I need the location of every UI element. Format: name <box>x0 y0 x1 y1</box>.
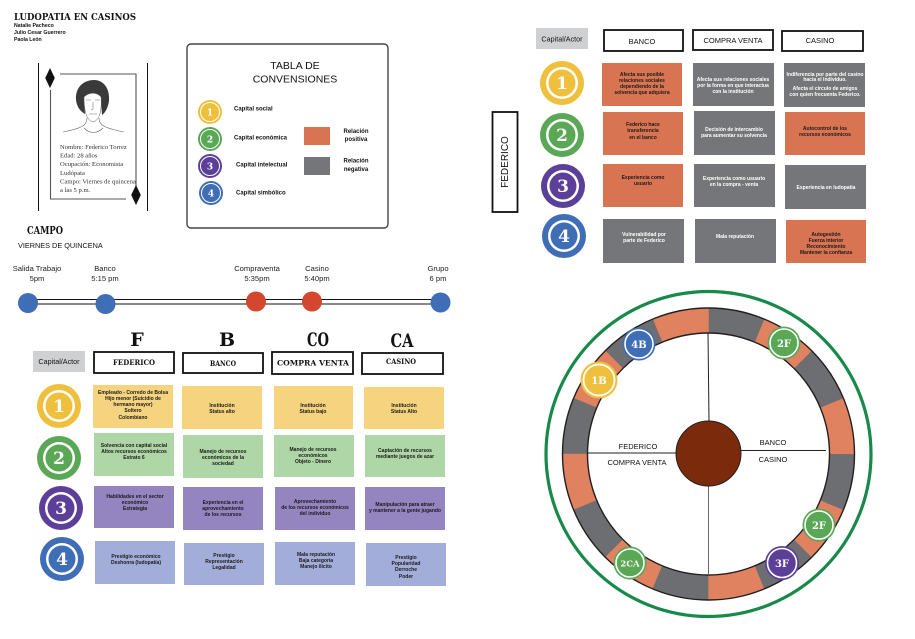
row 3 cells: Experiencia como usuario <box>703 176 765 182</box>
chip 2CA: 2CA <box>620 560 640 570</box>
row 2 cells: mediante juegos de azar <box>376 454 434 460</box>
column letters: CA <box>390 330 414 352</box>
row 3 cells: Experiencia en ludopatía <box>797 185 856 191</box>
wheel labels: FEDERICO <box>619 442 658 451</box>
capital badge 2 <box>37 436 81 480</box>
row 1 cells: Status alto <box>209 409 235 415</box>
row 1 cells: Afecta el círculo de amigos <box>793 86 858 92</box>
chip 2CA <box>614 546 646 580</box>
character description: Edad: 28 años <box>60 152 98 160</box>
capital badge 3: 3 <box>55 499 67 519</box>
row 2 cells: sociedad <box>212 461 234 467</box>
capital badge 3: 3 <box>557 177 569 197</box>
row 1 cells: hacia el individuo. <box>803 77 847 83</box>
character description: Nombre: Federico Torrez <box>60 144 127 151</box>
wheel labels: BANCO <box>760 438 787 447</box>
campo heading: CAMPO <box>27 224 63 237</box>
row 4 cells: Legalidad <box>212 565 236 571</box>
row 1 cells: hermano mayor) <box>113 402 153 408</box>
header: capital/actor: Capital/Actor <box>38 357 80 366</box>
row 2 cells: económicos de la <box>202 455 244 461</box>
row 1 cells: relaciones sociales <box>619 78 665 84</box>
row 2 cells: para aumentar su solvencia <box>701 133 767 139</box>
row 1 cells: Afecta sus posible <box>620 72 664 78</box>
table: federico relations (right) <box>536 28 866 263</box>
header: capital/actor: Capital/Actor <box>541 34 583 44</box>
legend: relacion positiva <box>304 127 369 145</box>
row 4 cells: Fuerza interior <box>809 238 843 244</box>
federico label box: FEDERICO <box>500 136 511 188</box>
legend: capital simbolico: Capital simbólico <box>236 190 286 196</box>
legend heading <box>253 60 337 86</box>
chip 3F <box>765 546 799 580</box>
capital badge 4 <box>542 214 586 258</box>
capital badge 3 <box>541 164 585 208</box>
header: federico: FEDERICO <box>113 358 155 367</box>
row 3 cells: económico <box>122 500 148 506</box>
stop: salida trabajo: 5pm <box>30 274 44 283</box>
row 2 cells: Objeto - Dinero <box>295 459 331 465</box>
row 4 cells: Representación <box>205 559 243 565</box>
row 4 cells <box>603 219 866 263</box>
legend: capital social: Capital social <box>234 106 273 112</box>
legend: relacion negativa: negativa <box>344 167 369 173</box>
stop: grupo: 6 pm <box>430 274 446 283</box>
row 3 cells <box>603 164 866 209</box>
authors: Paola León <box>14 37 42 43</box>
header: casino <box>782 31 863 51</box>
header: compra venta <box>272 352 353 374</box>
header: capital/actor <box>33 351 85 372</box>
row 3 cells: aprovechamiento <box>202 506 244 512</box>
federico label box <box>492 112 518 212</box>
stop: banco: Banco <box>94 264 116 273</box>
row 1 cells: Indiferencia por parte del casino <box>787 72 863 78</box>
row 2 cells: en el banco <box>629 135 657 141</box>
row 3 cells: Habilidades en el sector <box>106 494 164 500</box>
column letters: B <box>219 329 235 351</box>
legend: capital intelectual: Capital intelectual <box>236 162 288 168</box>
row 4 cells: Prestigio <box>395 555 417 561</box>
row 2 cells <box>603 111 865 155</box>
legend heading: CONVENSIONES <box>253 74 337 86</box>
row 4 cells: Prestigio <box>213 553 235 559</box>
row 3 cells: Estrategia <box>123 506 147 512</box>
row 1 cells: Empleado - Corredo de Bolsa <box>98 390 168 396</box>
legend heading: TABLA DE <box>270 60 320 72</box>
capital badge 1 <box>37 384 81 428</box>
legend: capital intelectual <box>198 154 288 178</box>
header: compra venta: COMPRA VENTA <box>277 358 350 368</box>
legend: capital economica: 2 <box>207 136 213 146</box>
capital badge 4 <box>40 537 84 581</box>
character description: Campo: Viernes de quincena <box>60 178 136 186</box>
row 3 cells: de los recursos <box>205 512 242 518</box>
row 2 cells: Solvencia con capital social <box>101 443 168 449</box>
panel: tabla de convensiones <box>187 44 388 228</box>
header: capital/actor <box>536 28 588 49</box>
character description: Ocupación: Economista <box>60 161 123 168</box>
chip 2F bottom: 2F <box>812 521 826 532</box>
capital badge 1: 1 <box>556 74 568 94</box>
row 2 cells: económicos <box>298 453 328 459</box>
header: casino <box>362 353 443 374</box>
row 4 cells: Reconocimiento <box>807 244 845 250</box>
row 2 cells: Decisión de intercambio <box>705 127 763 133</box>
stop: compraventa: 5:35pm <box>244 274 270 283</box>
stop: salida trabajo: Salida Trabajo <box>13 264 61 273</box>
row 2 cells: Federico hace <box>626 122 660 128</box>
legend: capital economica <box>198 127 288 151</box>
header: casino: CASINO <box>386 357 416 366</box>
title: LUDOPATIA EN CASINOS <box>14 12 136 23</box>
capital badge 3 <box>39 486 83 530</box>
legend: relacion positiva: Relación <box>343 129 369 135</box>
capital badge 1: 1 <box>53 397 65 417</box>
column letters: CO <box>307 329 329 351</box>
roulette wheel <box>534 280 883 628</box>
row 1 cells <box>602 63 865 107</box>
row 3 cells: de los recursos económicos <box>281 505 349 511</box>
stop: banco: 5:15 pm <box>91 274 119 283</box>
stop: banco <box>91 264 119 314</box>
wheel labels: CASINO <box>759 455 788 464</box>
header: casino: CASINO <box>806 36 835 45</box>
header: compra venta <box>693 30 773 50</box>
row 4 cells: Poder <box>399 574 413 580</box>
row 2 cells: Captación de recursos <box>378 448 432 454</box>
row 2 cells: transferencia <box>627 128 659 134</box>
row 3 cells: Experiencia en el <box>203 500 244 506</box>
table: capital per actor (left) <box>33 329 446 586</box>
wheel labels: COMPRA VENTA <box>607 458 667 467</box>
header: banco: BANCO <box>629 37 656 46</box>
legend: capital intelectual: 3 <box>207 162 213 172</box>
row 1 cells: solvencia que adquiera <box>614 90 670 96</box>
row 3 cells: Manipulación para atraer <box>375 502 435 508</box>
row 1 cells: Hijo menor (Suicidio de <box>105 396 161 402</box>
row 4 cells: Deshonra (ludopatía) <box>111 560 161 566</box>
row 4 cells: parte de Federico <box>623 238 665 244</box>
capital badge 1 <box>540 61 584 105</box>
row 4 cells: Manejo ilícito <box>300 564 332 570</box>
chip 2F bottom <box>802 508 836 542</box>
row 4 cells: Mala reputación <box>716 234 754 240</box>
row 3 cells: y mantener a la gente jugando <box>369 508 441 514</box>
row 3 cells: Aprovechamiento <box>294 499 336 505</box>
authors: Julio Cesar Guerrero <box>14 30 66 36</box>
legend: relacion negativa: Relación <box>343 158 369 164</box>
row 2 cells: recursos económicos <box>799 132 851 138</box>
row 2 cells: Manejo de recursos <box>290 447 337 453</box>
stop: compraventa <box>234 264 281 312</box>
row 4 cells: Autogestión <box>811 232 841 238</box>
wheel labels <box>607 438 788 467</box>
stop: grupo: Grupo <box>427 264 449 273</box>
legend: capital simbolico <box>199 181 286 205</box>
legend: capital economica: Capital económica <box>234 136 288 142</box>
column letters <box>130 329 414 352</box>
stop: grupo <box>427 264 450 312</box>
character description <box>60 144 136 194</box>
capital badge 2: 2 <box>53 449 65 469</box>
row 4 cells: Mantener la confianza <box>800 250 852 256</box>
row 4 cells: Baja categoría <box>299 558 333 564</box>
chip 1B: 1B <box>591 376 607 387</box>
row 3 cells: usuario <box>634 181 652 187</box>
chip 4B <box>622 328 656 360</box>
row 4 cells: Derroche <box>395 567 417 573</box>
row 2 cells: Altos recursos económicos <box>101 449 167 455</box>
row 4 cells: Prestigio económico <box>111 554 161 560</box>
row 1 cells: con quien frecuenta Federico. <box>789 92 861 98</box>
row 4 cells <box>95 541 446 586</box>
chip 2F top <box>768 326 800 360</box>
header: banco <box>604 30 683 51</box>
row 1 cells: Soltero <box>124 408 142 414</box>
character description: Ludópata <box>60 170 85 177</box>
stop: casino: Casino <box>305 264 329 273</box>
row 3 cells <box>94 486 445 530</box>
row 1 cells: Institución <box>300 403 326 409</box>
legend: capital simbolico: 4 <box>208 190 214 200</box>
stop: casino: 5:40pm <box>304 274 330 283</box>
header: compra venta: COMPRA VENTA <box>703 36 763 45</box>
row 1 cells: dependiendo de la <box>620 84 664 90</box>
campo heading: VIERNES DE QUINCENA <box>18 241 103 250</box>
portrait of Federico <box>63 80 124 132</box>
row 1 cells <box>93 385 444 429</box>
icon: diamond bottom <box>131 185 141 205</box>
legend: capital social: 1 <box>207 108 213 118</box>
legend: relacion positiva: positiva <box>345 137 368 143</box>
campo heading <box>18 224 103 250</box>
authors <box>14 23 66 43</box>
character description: a las 5 p.m. <box>60 187 91 194</box>
stop: salida trabajo <box>13 264 61 313</box>
row 4 cells: Vulnerabilidad por <box>622 232 666 238</box>
row 1 cells: Afecta sus relaciones sociales <box>697 77 769 83</box>
capital badge 2: 2 <box>556 126 568 146</box>
row 1 cells: Institución <box>391 403 417 409</box>
capital badge 4: 4 <box>558 227 570 247</box>
row 3 cells: Experiencia como <box>622 175 664 181</box>
row 4 cells: Popularidad <box>392 561 420 567</box>
chip 2F top: 2F <box>777 339 791 350</box>
chip 3F: 3F <box>775 559 789 570</box>
header: banco <box>183 353 263 373</box>
row 2 cells: Estrato 6 <box>123 455 145 461</box>
row 2 cells: Manejo de recursos <box>200 449 247 455</box>
capital badge 2 <box>540 113 584 157</box>
icon: diamond top <box>45 68 55 88</box>
legend: relacion negativa <box>304 157 369 175</box>
stop: compraventa: Compraventa <box>234 264 281 273</box>
row 3 cells: en la compra - venta <box>710 182 758 188</box>
timeline <box>13 264 450 314</box>
row 1 cells: por la forma en que interactua <box>697 83 769 89</box>
capital badge 4: 4 <box>56 550 68 570</box>
header: federico <box>94 352 174 373</box>
row 1 cells: Colombiano <box>119 415 147 421</box>
chip 1B <box>580 362 618 398</box>
row 2 cells <box>94 433 445 478</box>
row 3 cells: del individuo <box>300 511 330 517</box>
header: banco: BANCO <box>210 359 236 368</box>
row 1 cells: Status bajo <box>300 409 326 415</box>
row 1 cells: Status Alto <box>391 409 417 415</box>
chip 4B: 4B <box>631 340 647 351</box>
row 4 cells: Mala reputación <box>297 552 335 558</box>
row 2 cells: Autocontrol de los <box>803 126 847 132</box>
legend: capital social <box>198 100 273 124</box>
row 1 cells: con la institución <box>712 89 754 95</box>
row 1 cells: Institución <box>209 403 235 409</box>
wheel hub <box>676 421 741 486</box>
stop: casino <box>302 264 330 312</box>
column letters: F <box>130 329 144 351</box>
authors: Natalie Pacheco <box>14 23 54 29</box>
panel: character card <box>38 63 148 211</box>
